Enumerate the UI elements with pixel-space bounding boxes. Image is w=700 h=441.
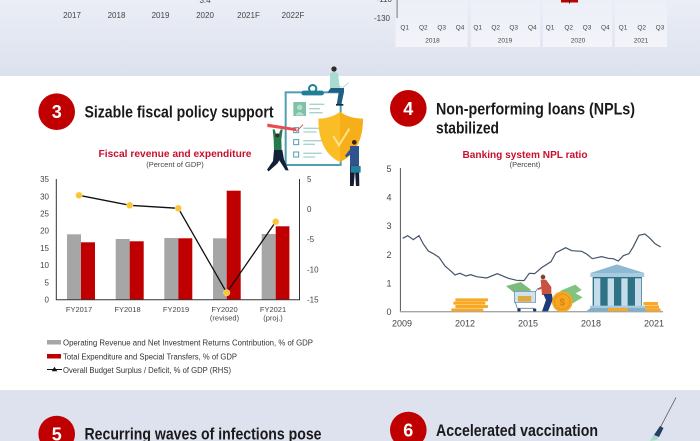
left chart year labels: 2019 [152,11,170,20]
left axis labels: 10 [40,261,50,270]
right chart quarterly panels: Q4 [528,24,537,32]
left chart year labels: 2020 [196,11,214,20]
axis labels [386,164,664,328]
axis labels: 1 [386,278,392,288]
badge: section 3: 3 [52,102,62,122]
illustration: clipboard, shield and people [267,66,363,186]
left axis labels: 35 [40,175,50,184]
right chart quarterly panels: Q1 [619,24,628,32]
left axis labels: 30 [40,192,50,201]
right axis labels: -15 [307,296,319,305]
left chart year labels: 2017 [63,11,81,20]
left chart year labels: 2021F [237,11,260,20]
person on clipboard [327,66,349,106]
banknotes and dollar coin: $ [560,297,566,308]
axis labels: 2 [386,250,392,260]
right chart quarterly panels: Q1 [473,24,482,32]
shield [318,112,363,162]
heading: section 4 [436,100,635,137]
person in blue suit [345,140,361,186]
category labels: (revised) [210,314,240,322]
left axis labels [40,175,50,305]
left chart year labels: 2022F [282,11,304,20]
left chart year labels: 2018 [108,11,126,20]
right chart quarterly panels: Q4 [456,24,465,32]
axis labels: 2015 [518,318,538,328]
category labels: FY2020 [211,305,238,314]
expenditure bars [81,191,289,300]
legend: fiscal chart [47,338,313,375]
icon: syringe [650,398,676,441]
illustration: coins, cart, shopper and bank [451,264,661,312]
heading: section 3: Sizable fiscal policy support [84,104,274,122]
axis labels: 4 [386,192,392,202]
badge: section 3 [38,93,75,130]
chart subtitle: fiscal: (Percent of GDP) [146,160,204,169]
bank building [586,264,649,311]
heading: section 4: stabilized [436,119,499,137]
axis labels: 0 [386,307,392,317]
right axis labels: 5 [307,175,312,184]
category labels: (proj.) [263,314,283,322]
category labels: FY2017 [66,305,92,314]
right chart quarterly panels: -130 [374,14,391,23]
budget balance line [79,195,276,293]
chart title: NPL: Banking system NPL ratio [462,149,588,161]
coin stack left [451,298,488,311]
legend: fiscal chart: Overall Budget Surplus / Deficit, % of GDP (RHS) [63,366,231,375]
chart subtitle: NPL: (Percent) [510,160,541,169]
left axis labels: 5 [45,278,50,288]
person with red pencil [267,124,297,171]
legend: fiscal chart: Operating Revenue and Net Investment Returns Contribution, % of GDP [63,338,313,348]
shopper [538,275,553,311]
right chart quarterly panels: Q2 [419,24,428,32]
coin markers [76,192,279,296]
right chart quarterly panels: Q2 [491,24,500,32]
right chart quarterly panels: 2018 [425,38,440,44]
right chart quarterly panels: 2021 [634,38,649,44]
panel: bottom band [0,390,700,441]
right chart quarterly panels: Q2 [564,24,573,32]
left axis labels: 25 [40,210,50,218]
left axis labels: 15 [40,244,50,253]
left axis labels: 20 [40,227,50,236]
axis labels: 5 [386,164,392,174]
badge: section 4 [390,90,427,127]
right chart quarterly panels: Q2 [637,24,646,32]
axis labels: 3 [386,221,392,231]
shopping cart with banknotes [506,282,538,312]
category labels [66,305,286,322]
coin stack right [643,302,661,311]
right chart quarterly panels: Q3 [583,24,592,32]
right chart quarterly panels [374,0,667,47]
chart: banking system NPL ratio [386,164,664,328]
right chart quarterly panels: 2020 [571,38,586,44]
right chart quarterly panels: Q1 [546,24,555,32]
chart: fiscal revenue and expenditure [40,175,319,322]
badge: section 4: 4 [403,99,413,119]
left chart year labels [63,0,304,20]
category labels: FY2021 [260,305,286,314]
NPL line [403,234,661,281]
chart title: fiscal: Fiscal revenue and expenditure [98,148,252,160]
legend: fiscal chart: Total Expenditure and Special Transfers, % of GDP [63,352,237,362]
right chart quarterly panels: Q3 [437,24,446,32]
category labels: FY2018 [114,305,141,314]
axis labels: 2018 [581,318,601,328]
right chart quarterly panels: 2019 [498,38,513,44]
revenue bars [67,234,276,300]
right axis labels: -10 [307,266,319,274]
axis labels: 2012 [455,318,475,328]
right axis labels: -5 [307,235,315,244]
banknotes and dollar coin [552,285,583,312]
left axis labels: 0 [45,296,50,305]
badge: section 5 [38,416,75,441]
right chart quarterly panels: Q1 [400,24,409,32]
right axis labels [307,175,319,305]
badge: section 6 [390,412,427,441]
clipboard [286,85,341,165]
category labels: FY2019 [163,305,189,314]
panel: top band with cropped charts [0,0,700,76]
right chart quarterly panels: Q3 [509,24,518,32]
right chart quarterly panels: Q4 [601,24,610,32]
right axis labels: 0 [307,205,312,214]
axis labels: 2009 [392,318,412,328]
right chart quarterly panels: Q3 [656,24,665,32]
heading: section 4: Non-performing loans (NPLs) [436,100,635,118]
axis labels: 2021 [644,318,664,328]
badge: section 6: 6 [403,420,413,440]
heading: section 6: Accelerated vaccination [436,422,598,440]
